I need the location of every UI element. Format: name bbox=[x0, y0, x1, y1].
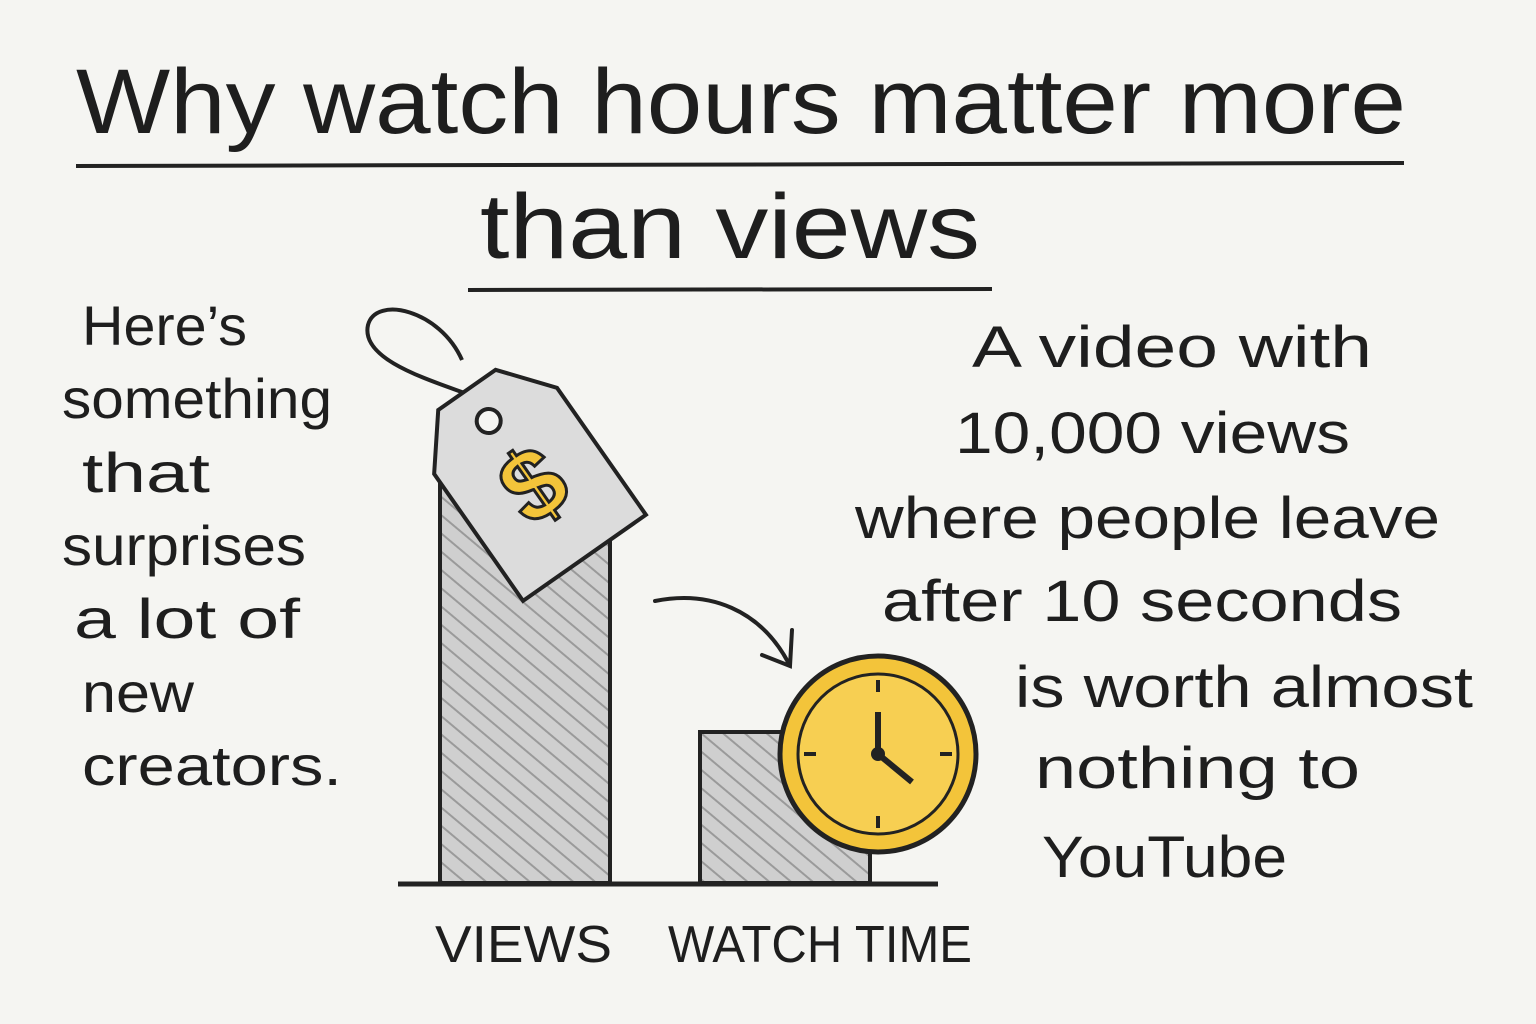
text block: left intro: creators. bbox=[82, 734, 342, 797]
text block: right explanation: after 10 seconds bbox=[882, 569, 1402, 634]
text block: left intro bbox=[62, 294, 342, 797]
arrow bbox=[655, 598, 792, 666]
text block: right explanation bbox=[854, 315, 1473, 890]
icon: price tag: $ bbox=[479, 423, 588, 547]
bar chart bbox=[398, 470, 938, 884]
icon: price tag bbox=[367, 310, 646, 601]
text block: left intro: something bbox=[62, 367, 332, 430]
label: views: VIEWS bbox=[435, 916, 612, 974]
bar: views bbox=[440, 470, 610, 883]
text block: left intro: surprises bbox=[62, 514, 306, 577]
title: than views bbox=[480, 176, 980, 278]
text block: right explanation: where people leave bbox=[854, 486, 1440, 551]
text block: right explanation: is worth almost bbox=[1015, 655, 1473, 720]
text block: right explanation: A video with bbox=[972, 315, 1372, 380]
text block: left intro: new bbox=[82, 661, 195, 724]
text block: right explanation: YouTube bbox=[1042, 825, 1287, 890]
title bbox=[76, 51, 1406, 290]
text block: left intro: that bbox=[82, 441, 211, 504]
text block: left intro: a lot of bbox=[74, 587, 301, 650]
title: Why watch hours matter more bbox=[76, 51, 1406, 153]
text block: right explanation: 10,000 views bbox=[955, 401, 1350, 466]
label: watch time: WATCH TIME bbox=[668, 916, 972, 974]
icon: clock bbox=[780, 656, 976, 852]
text block: left intro: Here’s bbox=[82, 294, 247, 357]
bar: watch time bbox=[700, 732, 870, 883]
text block: right explanation: nothing to bbox=[1035, 736, 1360, 801]
